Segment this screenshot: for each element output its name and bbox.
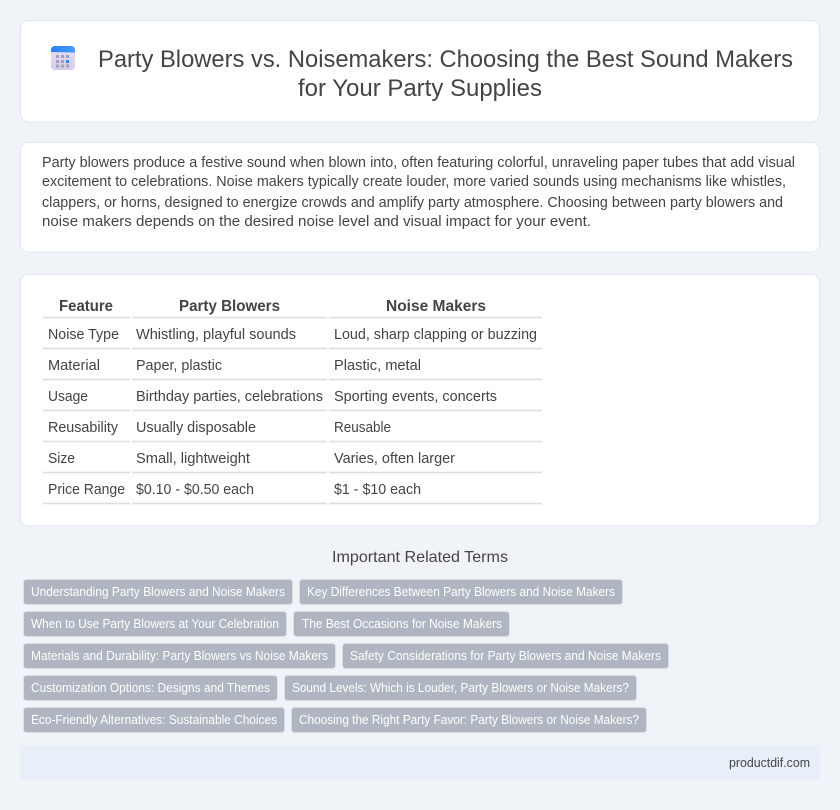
table row: price range — [43, 482, 542, 504]
table row: price range: $1 - $10 each — [334, 482, 421, 498]
table row: material: Plastic, metal — [334, 358, 421, 374]
tag: Safety Considerations for Party Blowers and Noise Makers — [350, 649, 661, 663]
table row: usage: Birthday parties, celebrations — [136, 389, 323, 405]
tag: Understanding Party Blowers and Noise Makers — [31, 585, 285, 599]
table row: noise type: Loud, sharp clapping or buzzing — [334, 327, 537, 343]
tag — [24, 708, 284, 732]
title — [98, 46, 793, 102]
table row: usage — [43, 389, 542, 410]
title: for Your Party Supplies — [298, 75, 542, 102]
tag: When to Use Party Blowers at Your Celebration — [31, 617, 279, 631]
table row: reusability: Reusability — [48, 420, 119, 436]
text block: introduction paragraph: Party blowers produce a festive sound when blown into, often featuring colorful, unraveling paper tubes that add visual — [42, 154, 795, 171]
tag — [342, 644, 668, 668]
heading: important related terms: Important Related Terms — [332, 549, 508, 566]
tag: Materials and Durability: Party Blowers vs Noise Makers — [31, 649, 328, 663]
tag — [294, 612, 510, 636]
tag — [300, 580, 622, 604]
table row: size: Varies, often larger — [334, 451, 455, 467]
table row: size: Size — [48, 451, 75, 467]
tag — [24, 644, 336, 668]
footer: productdif.com — [729, 756, 810, 770]
panel: title header — [20, 20, 820, 122]
table row: reusability: Usually disposable — [136, 420, 256, 436]
tag — [24, 612, 286, 636]
title: Party Blowers vs. Noisemakers: Choosing the Best Sound Makers — [98, 46, 793, 73]
table row: price range: $0.10 - $0.50 each — [136, 482, 254, 498]
text block: introduction paragraph — [42, 154, 795, 230]
table row: reusability — [43, 420, 542, 442]
tag: Eco-Friendly Alternatives: Sustainable Choices — [31, 713, 277, 727]
table row: material: Paper, plastic — [136, 358, 222, 374]
table header row — [43, 298, 542, 318]
tag — [24, 580, 292, 604]
table row: reusability: Reusable — [334, 420, 391, 436]
tag — [284, 676, 636, 700]
table header row: Feature — [59, 298, 113, 315]
text block: introduction paragraph: clappers, or horns, designed to energize crowds and amplify party atmosphere. Choosing between party blowers and — [42, 194, 783, 211]
tag: Sound Levels: Which is Louder, Party Blowers or Noise Makers? — [292, 681, 629, 695]
text block: introduction paragraph: noise makers depends on the desired noise level and visual impact for your event. — [42, 213, 591, 230]
tag list: related terms — [24, 580, 668, 732]
table row: usage: Sporting events, concerts — [334, 389, 497, 405]
text block: introduction paragraph: excitement to celebrations. Noise makers typically create louder, more varied sounds using mechanisms like whistles, — [42, 173, 786, 190]
tag: Key Differences Between Party Blowers and Noise Makers — [307, 585, 615, 599]
tag — [24, 676, 278, 700]
panel: introduction — [20, 142, 820, 252]
table row: usage: Usage — [48, 389, 88, 405]
table header row: Party Blowers — [179, 298, 280, 315]
table row: noise type — [43, 327, 542, 348]
table row: price range: Price Range — [48, 482, 125, 498]
table row: size — [43, 451, 542, 472]
panel: comparison table — [20, 274, 820, 526]
table row: size: Small, lightweight — [136, 451, 250, 467]
tag: Choosing the Right Party Favor: Party Blowers or Noise Makers? — [299, 713, 639, 727]
table row: material — [43, 358, 542, 380]
tag: The Best Occasions for Noise Makers — [302, 617, 502, 631]
table row: material: Material — [48, 358, 100, 374]
table header row: Noise Makers — [386, 298, 486, 315]
icon: calendar — [51, 46, 75, 70]
table row: noise type: Noise Type — [48, 327, 119, 343]
tag: Customization Options: Designs and Themes — [31, 681, 270, 695]
tag — [292, 708, 646, 732]
table row: noise type: Whistling, playful sounds — [136, 327, 296, 343]
footer — [20, 746, 820, 780]
